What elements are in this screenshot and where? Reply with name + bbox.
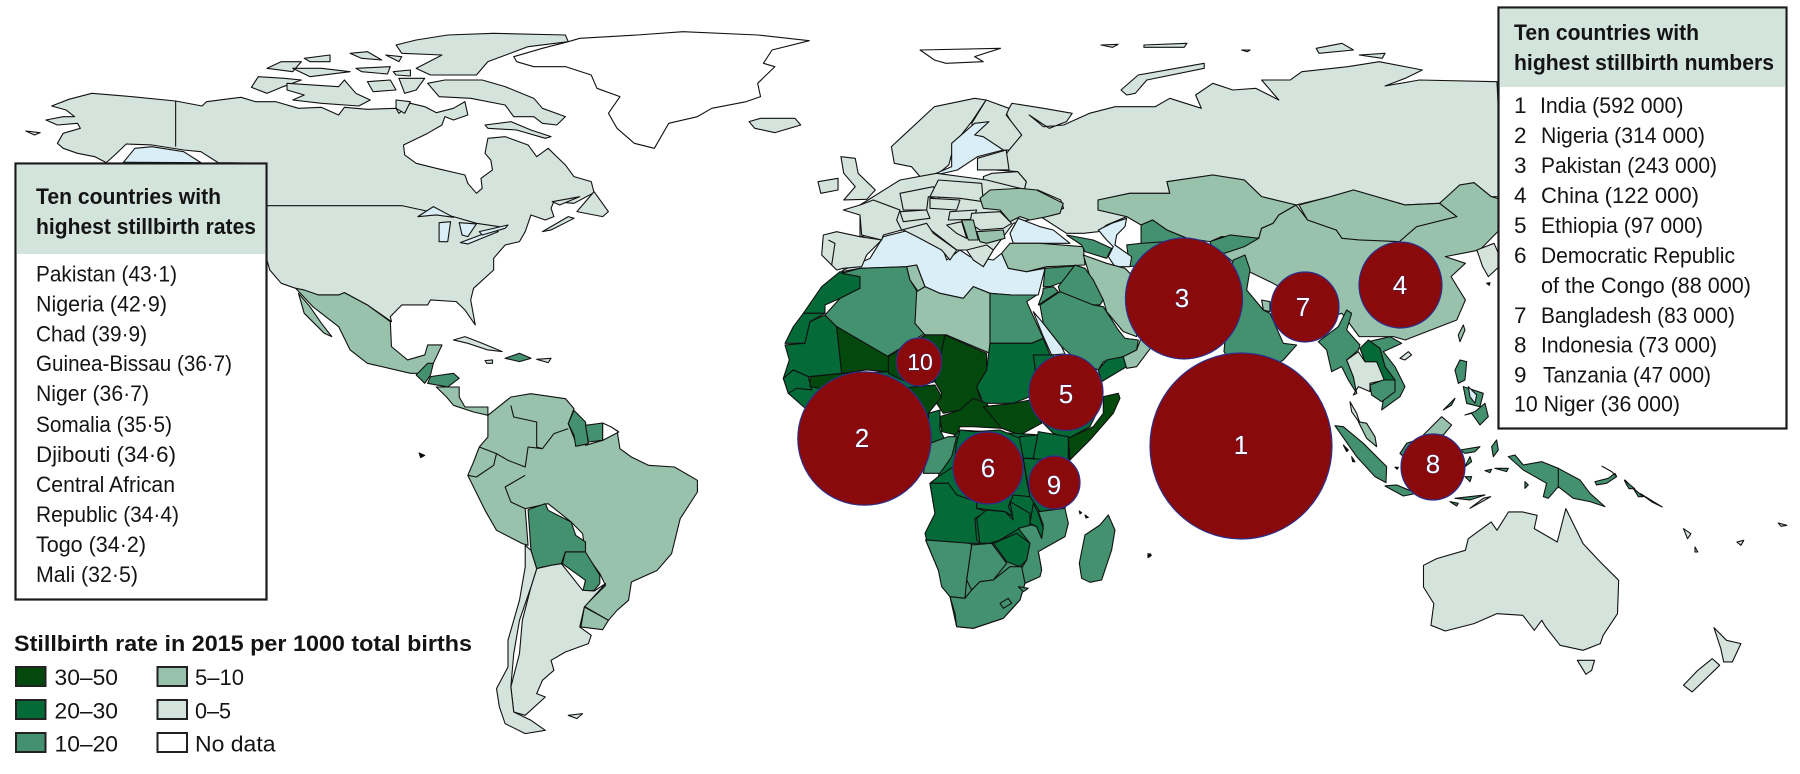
list: highest stillbirth numbers: of the Congo (88 000)	[1541, 273, 1751, 298]
bubble 9: Tanzania	[1029, 456, 1080, 509]
heading: numbers panel	[1514, 20, 1774, 75]
list: highest stillbirth numbers: 1	[1514, 93, 1527, 118]
list: highest stillbirth numbers: 2	[1514, 123, 1527, 148]
list: highest stillbirth numbers	[1514, 93, 1751, 416]
bubble 4: China	[1359, 242, 1442, 328]
list: highest stillbirth numbers: 8	[1514, 332, 1527, 358]
list: highest stillbirth rates: Niger (36·7)	[36, 381, 149, 406]
map: Mediterranean and nearby seas	[842, 227, 1137, 355]
bubbles: stillbirth numbers by country	[798, 238, 1465, 539]
list: highest stillbirth numbers: Tanzania (47 000)	[1543, 362, 1711, 388]
list: highest stillbirth rates: Guinea-Bissau (36·7)	[36, 351, 232, 376]
bubble 6: Democratic Republic of the Congo	[953, 432, 1023, 504]
map: northern and central Africa	[783, 265, 1120, 460]
list: highest stillbirth rates: Republic (34·4)	[36, 502, 179, 527]
panel: ten countries with highest stillbirth rates	[16, 164, 266, 600]
heading: rates panel	[36, 184, 256, 239]
bubble 5: Ethiopia: 5	[1059, 379, 1073, 409]
panel: ten countries with highest stillbirth numbers	[1498, 8, 1786, 428]
legend item: 5–10: 5–10	[195, 665, 244, 690]
map: Russia and northern Asia	[891, 43, 1503, 340]
legend item: no data: No data	[195, 732, 276, 756]
heading: numbers panel: Ten countries with	[1514, 20, 1699, 45]
map: Australia and New Zealand	[1148, 480, 1787, 692]
legend item: no data	[158, 732, 276, 756]
heading: rates panel: Ten countries with	[36, 184, 221, 209]
list: highest stillbirth rates: Nigeria (42·9)	[36, 292, 167, 316]
list: highest stillbirth numbers: 10 Niger (36 000)	[1514, 392, 1680, 416]
bubble 2: Nigeria	[798, 372, 931, 505]
legend item: 10–20: 10–20	[54, 732, 118, 756]
list: highest stillbirth rates: Togo (34·2)	[36, 532, 146, 557]
bubble 10: Niger: 10	[907, 349, 933, 375]
legend: stillbirth rate	[14, 631, 472, 756]
list: highest stillbirth rates: Central African	[36, 472, 175, 497]
map: South Asia and South-East Asia	[1224, 255, 1643, 508]
legend item: 20–30	[16, 698, 118, 724]
list: highest stillbirth numbers: 9	[1514, 362, 1527, 388]
list: highest stillbirth rates	[36, 262, 232, 587]
legend item: 10–20	[16, 732, 118, 756]
list: highest stillbirth rates: Somalia (35·5)	[36, 412, 172, 437]
list: highest stillbirth numbers: 3	[1514, 153, 1527, 178]
list: highest stillbirth rates: Chad (39·9)	[36, 322, 147, 346]
legend item: 0–5	[158, 698, 231, 724]
legend item: 30–50: 30–50	[54, 665, 118, 690]
list: highest stillbirth numbers: Ethiopia (97 000)	[1541, 213, 1703, 238]
list: highest stillbirth numbers: 4	[1514, 183, 1527, 208]
bubble 8: Indonesia: 8	[1426, 449, 1440, 479]
bubble 1: India	[1150, 353, 1332, 539]
bubble 3: Pakistan	[1125, 238, 1243, 359]
heading: rates panel: highest stillbirth rates	[36, 214, 256, 239]
map: Europe and Middle East	[783, 173, 1152, 460]
bubble 2: Nigeria: 2	[855, 423, 869, 453]
bubble 6: Democratic Republic of the Congo: 6	[981, 453, 995, 483]
list: highest stillbirth numbers: Bangladesh (83 000)	[1541, 303, 1735, 328]
list: highest stillbirth numbers: Pakistan (243 000)	[1541, 153, 1717, 178]
legend title: Stillbirth rate in 2015 per 1000 total births	[14, 631, 472, 656]
legend item: 0–5: 0–5	[195, 698, 231, 724]
bubble 10: Niger	[896, 338, 942, 386]
list: highest stillbirth numbers: 6	[1514, 243, 1527, 268]
list: highest stillbirth rates: Mali (32·5)	[36, 562, 138, 587]
list: highest stillbirth numbers: 7	[1514, 303, 1527, 328]
list: highest stillbirth numbers: Democratic Republic	[1541, 243, 1735, 268]
legend item: 20–30: 20–30	[54, 698, 118, 724]
legend item: 30–50	[16, 665, 118, 690]
list: highest stillbirth numbers: Nigeria (314 000)	[1541, 123, 1705, 148]
list: highest stillbirth numbers: 5	[1514, 213, 1527, 238]
list: highest stillbirth numbers: China (122 000)	[1541, 183, 1699, 208]
map: southern Africa and Madagascar	[923, 430, 1151, 628]
list: highest stillbirth rates: Djibouti (34·6)	[36, 442, 176, 467]
list: highest stillbirth numbers: India (592 000)	[1540, 93, 1684, 118]
bubble 1: India: 1	[1234, 430, 1248, 460]
bubble 8: Indonesia	[1401, 434, 1465, 500]
bubble 7: Bangladesh	[1271, 272, 1339, 342]
heading: numbers panel: highest stillbirth numbers	[1514, 50, 1774, 75]
bubble 3: Pakistan: 3	[1175, 283, 1189, 313]
bubble 5: Ethiopia	[1029, 354, 1103, 430]
list: highest stillbirth rates: Pakistan (43·1)	[36, 262, 177, 286]
legend item: 5–10	[158, 665, 244, 690]
map: South America	[419, 387, 697, 734]
bubble 9: Tanzania: 9	[1047, 470, 1061, 500]
bubble 7: Bangladesh: 7	[1296, 292, 1310, 322]
list: highest stillbirth numbers: Indonesia (73 000)	[1541, 332, 1717, 358]
map: North America	[26, 32, 875, 387]
bubble 4: China: 4	[1393, 270, 1407, 300]
